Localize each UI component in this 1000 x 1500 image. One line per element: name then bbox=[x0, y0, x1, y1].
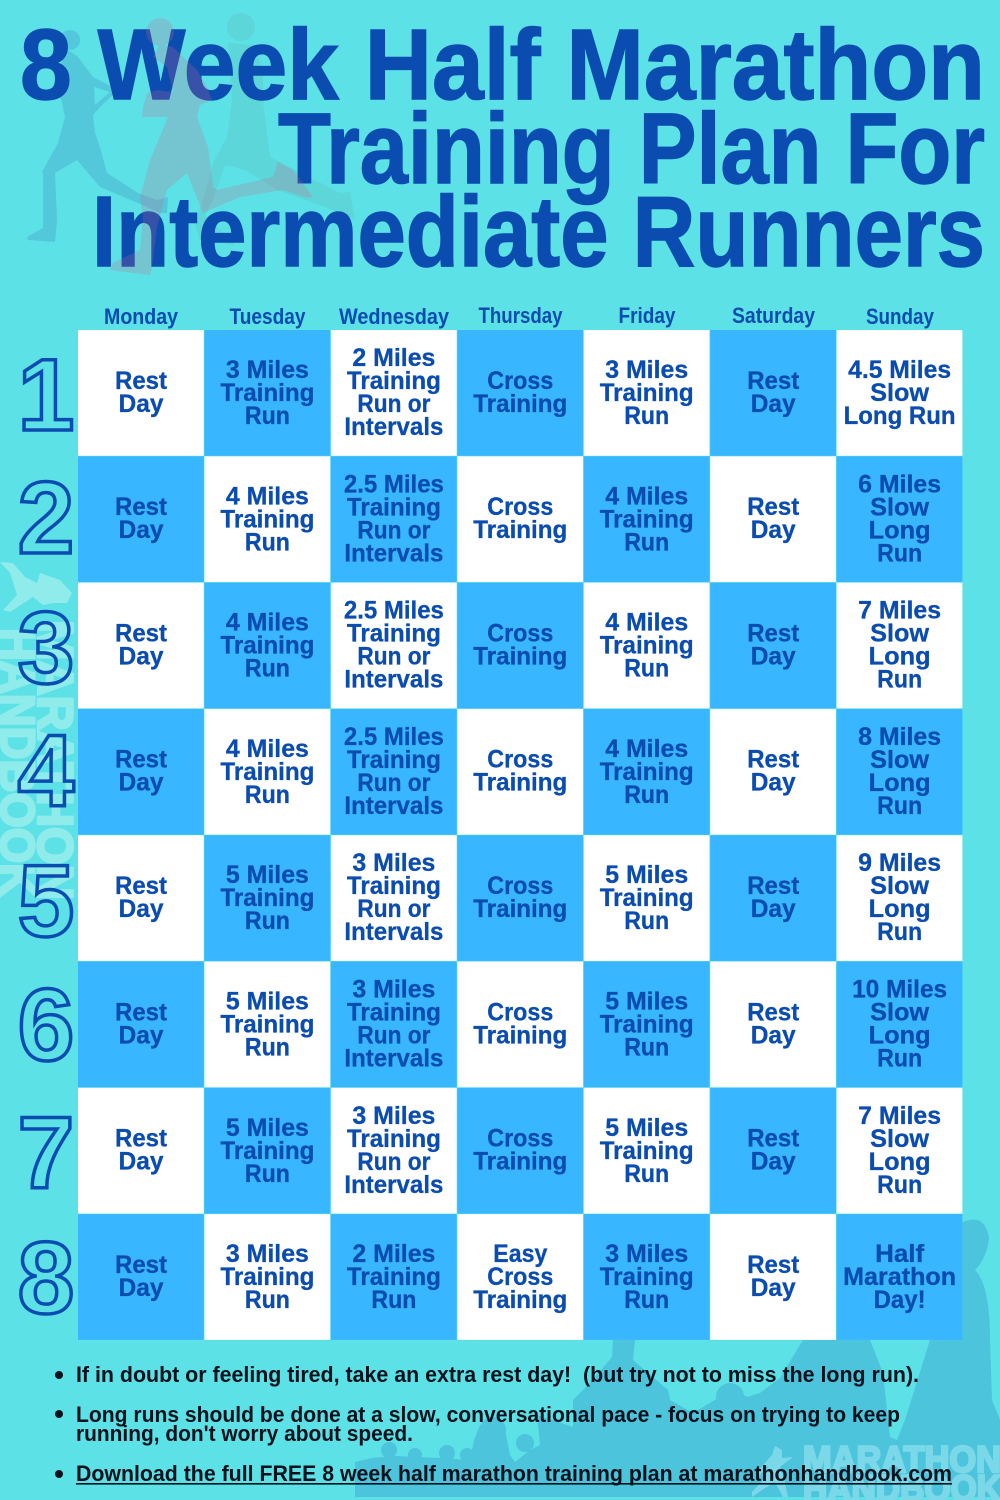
cell: friday run bbox=[584, 583, 710, 708]
cell: tuesday run: Run bbox=[245, 781, 290, 809]
cell: tuesday run: Training bbox=[220, 505, 314, 533]
cell: wednesday intervals: Training bbox=[347, 620, 441, 648]
cell: sunday long run bbox=[837, 456, 962, 582]
cell: wednesday intervals: Intervals bbox=[344, 918, 443, 946]
cell: wednesday intervals: Run or bbox=[357, 895, 431, 923]
cell: wednesday intervals: 2.5 Miles bbox=[344, 470, 444, 498]
cell: wednesday intervals: Run or bbox=[357, 516, 431, 544]
cell: friday run: 3 Miles bbox=[605, 356, 688, 384]
weekday headers: Tuesday bbox=[230, 304, 306, 329]
background: left vertical watermark: MARATHON bbox=[27, 620, 83, 900]
cell: friday run: Run bbox=[624, 655, 669, 683]
cell: friday run: Run bbox=[624, 907, 669, 935]
cell: thursday cross training: Cross bbox=[487, 1125, 553, 1153]
cell: sunday long run bbox=[837, 330, 962, 456]
cell: tuesday run: Run bbox=[245, 1034, 290, 1062]
week 5 row bbox=[78, 835, 962, 961]
cell: friday run bbox=[584, 1088, 710, 1214]
training plan grid bbox=[78, 330, 962, 1340]
cell: wednesday intervals: 3 Miles bbox=[352, 976, 435, 1004]
cell: friday run: Run bbox=[624, 1286, 669, 1314]
cell: monday rest: Day bbox=[118, 1148, 164, 1176]
cell: friday run: Run bbox=[624, 402, 669, 430]
tip 2: running, don't worry about speed. bbox=[76, 1421, 413, 1446]
cell: wednesday intervals: Run or bbox=[357, 769, 431, 797]
cell: saturday rest: Day bbox=[751, 1274, 796, 1302]
background: left vertical watermark bbox=[0, 562, 83, 900]
cell: sunday long run: 9 Miles bbox=[858, 849, 941, 877]
cell: friday run: Run bbox=[624, 1160, 669, 1188]
background: bottom right watermark bbox=[752, 1439, 1000, 1500]
cell: tuesday run: Training bbox=[220, 1010, 314, 1038]
cell: sunday long run: Run bbox=[877, 1171, 922, 1199]
cell: sunday long run bbox=[837, 962, 962, 1087]
week numbers: 3 bbox=[18, 591, 74, 705]
cell: thursday cross training bbox=[457, 962, 583, 1087]
cell: monday rest bbox=[78, 1214, 204, 1340]
cell: wednesday intervals: Run or bbox=[357, 390, 431, 418]
cell: wednesday intervals: Training bbox=[347, 872, 441, 900]
cell: thursday cross training: Training bbox=[473, 769, 567, 797]
cell: saturday rest: Day bbox=[751, 1021, 796, 1049]
cell: sunday long run bbox=[837, 835, 962, 961]
week numbers bbox=[18, 338, 75, 1335]
cell: wednesday intervals: 3 Miles bbox=[352, 1102, 435, 1130]
week numbers: 7 bbox=[18, 1096, 74, 1210]
cell: tuesday run: Training bbox=[220, 379, 314, 407]
cell: monday rest bbox=[78, 583, 204, 708]
week 4 row bbox=[78, 709, 962, 835]
cell: saturday rest bbox=[710, 962, 836, 1087]
cell: wednesday run: Training bbox=[347, 1263, 441, 1291]
cell: thursday cross training bbox=[457, 456, 583, 582]
cell: sunday long run: Long bbox=[869, 1022, 931, 1050]
week numbers: 8 bbox=[18, 1221, 74, 1335]
tips list bbox=[55, 1362, 952, 1486]
cell: thursday easy cross training: Easy bbox=[493, 1240, 547, 1268]
cell: wednesday intervals: Training bbox=[347, 746, 441, 774]
week numbers: 5 bbox=[18, 844, 74, 958]
cell: thursday cross training bbox=[457, 835, 583, 961]
cell: wednesday intervals: Intervals bbox=[344, 539, 443, 567]
cell: tuesday run bbox=[204, 583, 330, 708]
cell: tuesday run: Training bbox=[220, 1137, 314, 1165]
cell: friday run bbox=[584, 962, 710, 1087]
weekday headers: Thursday bbox=[478, 303, 563, 328]
week numbers: 1 bbox=[18, 338, 74, 452]
cell: thursday easy cross training: Cross bbox=[487, 1263, 553, 1291]
weekday headers: Wednesday bbox=[339, 304, 450, 329]
cell: friday run: Training bbox=[600, 884, 694, 912]
week 6 row bbox=[78, 962, 962, 1087]
cell: wednesday intervals bbox=[331, 835, 457, 961]
cell: thursday cross training bbox=[457, 330, 583, 456]
cell: friday run: Training bbox=[600, 758, 694, 786]
cell: tuesday run: Training bbox=[220, 632, 314, 660]
cell: thursday cross training bbox=[457, 1088, 583, 1214]
week numbers: 2 bbox=[18, 461, 74, 575]
cell: sunday long run: Slow bbox=[870, 998, 930, 1026]
cell: saturday rest: Day bbox=[751, 390, 796, 418]
cell: wednesday intervals: Run or bbox=[357, 1148, 431, 1176]
cell: wednesday intervals bbox=[331, 583, 457, 708]
cell: tuesday run: Run bbox=[245, 402, 290, 430]
cell: saturday rest bbox=[710, 456, 836, 582]
cell: saturday rest: Day bbox=[751, 516, 796, 544]
cell: wednesday intervals: 2 Miles bbox=[352, 344, 435, 372]
cell: sunday half marathon: Half bbox=[875, 1240, 925, 1268]
cell: sunday long run: 4.5 Miles bbox=[848, 356, 951, 384]
weekday headers: Saturday bbox=[732, 303, 816, 328]
cell: monday rest bbox=[78, 709, 204, 835]
cell: wednesday intervals bbox=[331, 962, 457, 1087]
cell: friday run: Run bbox=[624, 781, 669, 809]
cell: tuesday run: 3 Miles bbox=[226, 1240, 309, 1268]
cell: saturday rest: Rest bbox=[747, 619, 800, 647]
cell: wednesday intervals bbox=[331, 330, 457, 456]
cell: tuesday run: Run bbox=[245, 528, 290, 556]
cell: saturday rest: Rest bbox=[747, 1251, 800, 1279]
cell: saturday rest: Day bbox=[751, 895, 796, 923]
cell: tuesday run bbox=[204, 456, 330, 582]
cell: monday rest bbox=[78, 1088, 204, 1214]
cell: tuesday run: Training bbox=[220, 758, 314, 786]
cell: friday run: Training bbox=[600, 505, 694, 533]
cell: saturday rest bbox=[710, 1214, 836, 1340]
cell: thursday cross training: Training bbox=[473, 642, 567, 670]
cell: monday rest: Rest bbox=[115, 619, 168, 647]
cell: thursday cross training: Training bbox=[473, 1021, 567, 1049]
cell: tuesday run: Run bbox=[245, 907, 290, 935]
cell: sunday long run: Slow bbox=[870, 493, 930, 521]
cell: wednesday intervals: Intervals bbox=[344, 413, 443, 441]
cell: sunday long run: Run bbox=[877, 539, 922, 567]
cell: tuesday run: Run bbox=[245, 1160, 290, 1188]
cell: saturday rest bbox=[710, 835, 836, 961]
cell: friday run bbox=[584, 709, 710, 835]
cell: sunday long run: Long bbox=[869, 643, 931, 671]
cell: monday rest: Day bbox=[118, 895, 164, 923]
cell: wednesday intervals: 2.5 Miles bbox=[344, 723, 444, 751]
cell: wednesday intervals: Intervals bbox=[344, 792, 443, 820]
cell: monday rest: Rest bbox=[115, 998, 168, 1026]
cell: tuesday run bbox=[204, 709, 330, 835]
cell: tuesday run: 3 Miles bbox=[226, 356, 309, 384]
cell: saturday rest: Day bbox=[751, 769, 796, 797]
cell: wednesday intervals bbox=[331, 456, 457, 582]
cell: thursday cross training bbox=[457, 709, 583, 835]
cell: wednesday intervals: Training bbox=[347, 998, 441, 1026]
cell: sunday long run: Slow bbox=[870, 620, 930, 648]
cell: tuesday run: 5 Miles bbox=[226, 861, 309, 889]
cell: thursday cross training: Cross bbox=[487, 619, 553, 647]
cell: sunday long run: 7 Miles bbox=[858, 597, 941, 625]
background: right runner silhouette bbox=[195, 13, 355, 245]
cell: monday rest: Day bbox=[118, 1021, 164, 1049]
weekday headers: Friday bbox=[618, 303, 676, 328]
cell: thursday cross training bbox=[457, 583, 583, 708]
tip 2: Long runs should be done at a slow, conversational pace - focus on trying to keep bbox=[76, 1402, 900, 1427]
cell: monday rest: Rest bbox=[115, 872, 168, 900]
cell: saturday rest bbox=[710, 583, 836, 708]
cell: tuesday run bbox=[204, 1088, 330, 1214]
cell: sunday long run: Run bbox=[877, 792, 922, 820]
cell: saturday rest: Rest bbox=[747, 746, 800, 774]
cell: wednesday intervals: Intervals bbox=[344, 1171, 443, 1199]
cell: saturday rest: Rest bbox=[747, 872, 800, 900]
cell: monday rest bbox=[78, 962, 204, 1087]
cell: thursday cross training: Training bbox=[473, 1148, 567, 1176]
cell: tuesday run: Run bbox=[245, 655, 290, 683]
cell: tuesday run: 4 Miles bbox=[226, 609, 309, 637]
cell: wednesday intervals: Intervals bbox=[344, 666, 443, 694]
cell: thursday cross training: Training bbox=[473, 390, 567, 418]
background: left runner silhouette bbox=[27, 30, 168, 242]
cell: wednesday intervals: Training bbox=[347, 367, 441, 395]
cell: tuesday run bbox=[204, 1214, 330, 1340]
cell: friday run: Training bbox=[600, 379, 694, 407]
cell: friday run: 4 Miles bbox=[605, 735, 688, 763]
cell: friday run: 4 Miles bbox=[605, 482, 688, 510]
cell: thursday cross training: Cross bbox=[487, 998, 553, 1026]
cell: tuesday run: Training bbox=[220, 884, 314, 912]
cell: sunday long run: Long bbox=[869, 1148, 931, 1176]
title bbox=[20, 9, 985, 288]
cell: wednesday intervals: Intervals bbox=[344, 1044, 443, 1072]
cell: wednesday intervals: 2.5 Miles bbox=[344, 597, 444, 625]
foreground runner silhouette over title bbox=[110, 18, 313, 275]
cell: sunday long run: Slow bbox=[870, 1125, 930, 1153]
cell: saturday rest: Day bbox=[751, 1148, 796, 1176]
cell: tuesday run bbox=[204, 835, 330, 961]
cell: sunday long run: Slow bbox=[870, 746, 930, 774]
cell: wednesday intervals bbox=[331, 709, 457, 835]
cell: saturday rest bbox=[710, 709, 836, 835]
cell: sunday long run bbox=[837, 583, 962, 708]
cell: friday run: 5 Miles bbox=[605, 861, 688, 889]
cell: monday rest: Day bbox=[118, 516, 164, 544]
week 8 row bbox=[78, 1214, 962, 1340]
cell: thursday easy cross training bbox=[457, 1214, 583, 1340]
cell: tuesday run: Run bbox=[245, 1286, 290, 1314]
cell: thursday cross training: Cross bbox=[487, 367, 553, 395]
cell: monday rest bbox=[78, 835, 204, 961]
cell: sunday half marathon: Day! bbox=[874, 1286, 926, 1314]
cell: wednesday intervals: Run or bbox=[357, 1022, 431, 1050]
cell: sunday long run: Long bbox=[869, 769, 931, 797]
cell: friday run: 4 Miles bbox=[605, 609, 688, 637]
cell: friday run: 3 Miles bbox=[605, 1240, 688, 1268]
cell: tuesday run: 5 Miles bbox=[226, 988, 309, 1016]
cell: monday rest bbox=[78, 330, 204, 456]
cell: saturday rest: Rest bbox=[747, 367, 800, 395]
weekday headers bbox=[104, 303, 935, 329]
background: crowd silhouette bbox=[355, 1220, 1000, 1497]
cell: monday rest: Day bbox=[118, 642, 164, 670]
cell: monday rest: Rest bbox=[115, 1251, 168, 1279]
cell: monday rest: Day bbox=[118, 390, 164, 418]
cell: monday rest: Rest bbox=[115, 493, 168, 521]
cell: friday run: Run bbox=[624, 528, 669, 556]
week numbers: 4 bbox=[18, 714, 75, 828]
cell: wednesday run bbox=[331, 1214, 457, 1340]
cell: thursday cross training: Cross bbox=[487, 746, 553, 774]
cell: monday rest: Rest bbox=[115, 1125, 168, 1153]
week 3 row bbox=[78, 583, 962, 708]
cell: tuesday run: Training bbox=[220, 1263, 314, 1291]
cell: thursday cross training: Training bbox=[473, 516, 567, 544]
cell: monday rest: Day bbox=[118, 1274, 164, 1302]
cell: saturday rest: Day bbox=[751, 642, 796, 670]
cell: sunday half marathon bbox=[837, 1214, 962, 1340]
cell: friday run bbox=[584, 456, 710, 582]
cell: wednesday intervals: 3 Miles bbox=[352, 849, 435, 877]
cell: sunday long run: Run bbox=[877, 1044, 922, 1072]
week 1 row bbox=[78, 330, 962, 456]
cell: sunday long run: 8 Miles bbox=[858, 723, 941, 751]
cell: wednesday run: Run bbox=[371, 1286, 416, 1314]
week numbers: 6 bbox=[18, 968, 74, 1082]
cell: sunday long run: Long bbox=[869, 516, 931, 544]
cell: wednesday intervals bbox=[331, 1088, 457, 1214]
tip 2 bbox=[55, 1402, 900, 1446]
cell: tuesday run bbox=[204, 330, 330, 456]
cell: friday run: 5 Miles bbox=[605, 1114, 688, 1142]
cell: thursday easy cross training: Training bbox=[473, 1286, 567, 1314]
cell: saturday rest bbox=[710, 1088, 836, 1214]
cell: tuesday run bbox=[204, 962, 330, 1087]
tip 1: If in doubt or feeling tired, take an extra rest day! (but try not to miss the long run). bbox=[76, 1362, 919, 1387]
cell: monday rest bbox=[78, 456, 204, 582]
cell: tuesday run: 5 Miles bbox=[226, 1114, 309, 1142]
cell: friday run: Training bbox=[600, 1137, 694, 1165]
cell: monday rest: Rest bbox=[115, 367, 168, 395]
cell: sunday long run: 6 Miles bbox=[858, 470, 941, 498]
cell: monday rest: Day bbox=[118, 769, 164, 797]
cell: sunday long run: Long bbox=[869, 895, 931, 923]
cell: saturday rest bbox=[710, 330, 836, 456]
cell: friday run: Run bbox=[624, 1034, 669, 1062]
cell: wednesday intervals: Training bbox=[347, 1125, 441, 1153]
cell: tuesday run: 4 Miles bbox=[226, 482, 309, 510]
cell: friday run: Training bbox=[600, 1263, 694, 1291]
cell: saturday rest: Rest bbox=[747, 493, 800, 521]
cell: friday run bbox=[584, 835, 710, 961]
cell: wednesday run: 2 Miles bbox=[352, 1240, 435, 1268]
week 7 row bbox=[78, 1088, 962, 1214]
cell: wednesday intervals: Training bbox=[347, 493, 441, 521]
cell: thursday cross training: Cross bbox=[487, 493, 553, 521]
cell: tuesday run: 4 Miles bbox=[226, 735, 309, 763]
week 2 row bbox=[78, 456, 962, 582]
cell: sunday long run bbox=[837, 709, 962, 835]
weekday headers: Monday bbox=[104, 304, 179, 329]
cell: saturday rest: Rest bbox=[747, 998, 800, 1026]
cell: thursday cross training: Training bbox=[473, 895, 567, 923]
cell: wednesday intervals: Run or bbox=[357, 643, 431, 671]
cell: sunday half marathon: Marathon bbox=[843, 1263, 956, 1291]
cell: friday run bbox=[584, 1214, 710, 1340]
cell: sunday long run: Long Run bbox=[844, 402, 956, 430]
cell: friday run bbox=[584, 330, 710, 456]
cell: sunday long run: Slow bbox=[870, 379, 930, 407]
cell: sunday long run: 7 Miles bbox=[858, 1102, 941, 1130]
cell: thursday cross training: Cross bbox=[487, 872, 553, 900]
cell: friday run: Training bbox=[600, 632, 694, 660]
tip 3: download link: Download the full FREE 8 week half marathon training plan at marathonhandbook.com bbox=[76, 1461, 952, 1486]
cell: saturday rest: Rest bbox=[747, 1125, 800, 1153]
cell: friday run: 5 Miles bbox=[605, 988, 688, 1016]
cell: sunday long run: 10 Miles bbox=[852, 976, 947, 1004]
cell: monday rest: Rest bbox=[115, 746, 168, 774]
cell: sunday long run: Run bbox=[877, 666, 922, 694]
cell: sunday long run bbox=[837, 1088, 962, 1214]
cell: friday run: Training bbox=[600, 1010, 694, 1038]
cell: sunday long run: Slow bbox=[870, 872, 930, 900]
cell: sunday long run: Run bbox=[877, 918, 922, 946]
weekday headers: Sunday bbox=[866, 304, 935, 329]
